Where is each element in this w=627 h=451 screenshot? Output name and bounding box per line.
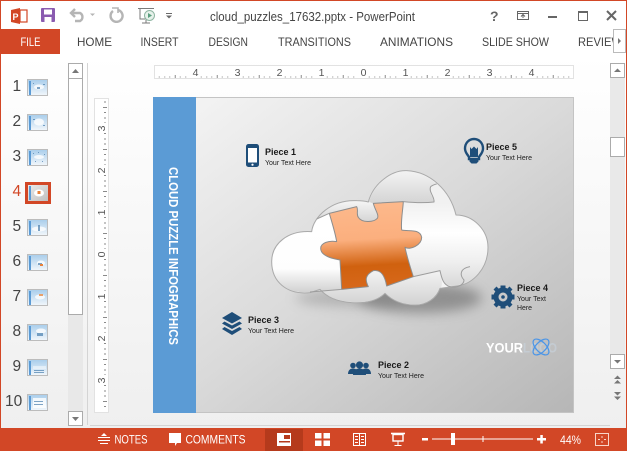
- zoom slider: [422, 433, 546, 445]
- vertical ruler: 0: [96, 251, 108, 257]
- item: Piece 3: Piece 3: [248, 315, 279, 325]
- vertical ruler: 1: [96, 209, 108, 215]
- tab labels: HOME: [77, 35, 112, 49]
- comments button: COMMENTS: [186, 432, 246, 446]
- thumbnail contents: [29, 81, 46, 410]
- slide numbers: 2: [12, 113, 21, 130]
- item: Piece 3: Your Text Here: [248, 328, 294, 335]
- item: Piece 2: Your Text Here: [378, 373, 424, 380]
- tab labels: ANIMATIONS: [380, 35, 453, 49]
- slide numbers: 9: [12, 358, 21, 375]
- fit to window button: [596, 434, 608, 446]
- document title: cloud_puzzles_17632.pptx - PowerPoint: [210, 10, 415, 24]
- cloud puzzle: [272, 171, 488, 305]
- slide numbers: 4: [12, 183, 22, 200]
- slide numbers: 10: [5, 393, 23, 410]
- item: Piece 1: [246, 144, 311, 167]
- piece: top lobe: [369, 171, 437, 203]
- comments button: [169, 432, 246, 446]
- panel: slide: [153, 97, 574, 413]
- tab labels: INSERT: [140, 35, 179, 49]
- logo: LOGO: [523, 340, 557, 356]
- piece seams: [310, 184, 470, 292]
- item: Piece 3: [222, 312, 294, 335]
- item: Piece 5: [465, 139, 532, 164]
- logo: YOUR: [486, 340, 523, 356]
- vertical ruler: [94, 98, 108, 412]
- item: Piece 1: Piece 1: [265, 147, 296, 157]
- notes button: NOTES: [114, 432, 148, 446]
- FILE tab: [1, 29, 60, 54]
- icon: light bulb: [465, 139, 483, 164]
- slide show button: [391, 434, 405, 446]
- ribbon tabs: [1, 29, 626, 54]
- icon: PowerPoint logo: P: [12, 12, 19, 22]
- slide numbers: 6: [12, 253, 21, 270]
- slide numbers: 1: [12, 78, 21, 95]
- piece: orange center: [321, 202, 422, 289]
- logo: [486, 336, 557, 358]
- icon: people: [348, 361, 371, 375]
- horizontal ruler: 3: [487, 67, 493, 79]
- vertical ruler: 1: [96, 293, 108, 299]
- FILE tab: FILE: [20, 35, 40, 49]
- icon: save: [41, 8, 55, 22]
- window controls: ?: [490, 8, 499, 24]
- piece: bottom: [310, 271, 442, 304]
- slide numbers: 8: [12, 323, 21, 340]
- slide numbers: 7: [12, 288, 21, 305]
- tab scroll button: [614, 30, 626, 52]
- cloud outline: [272, 171, 488, 305]
- tab labels: SLIDE SHOW: [482, 35, 550, 49]
- icon: PowerPoint logo: [11, 8, 27, 24]
- right scrollbar: [610, 63, 625, 400]
- vertical ruler: 3: [96, 377, 108, 383]
- horizontal ruler: 3: [235, 67, 241, 79]
- item: Piece 4: Your Text: [517, 296, 546, 303]
- status bar: [0, 428, 627, 451]
- icon: undo: [71, 9, 95, 21]
- horizontal ruler: 2: [445, 67, 451, 79]
- window controls: [490, 8, 616, 24]
- icon: gear: [492, 286, 514, 308]
- item: Piece 4: Piece 4: [517, 283, 548, 293]
- slide sorter button: [315, 433, 330, 446]
- piece: cloud base: [272, 171, 488, 305]
- selected thumbnail: [26, 184, 50, 202]
- slide numbers: 3: [12, 148, 21, 165]
- normal view button: [265, 429, 303, 451]
- item: Piece 2: [348, 360, 424, 380]
- item: Piece 4: Here: [517, 305, 532, 312]
- tab labels: TRANSITIONS: [278, 35, 351, 49]
- icon: customize menu: [166, 13, 172, 18]
- title: vertical heading: CLOUD PUZZLE INFOGRAPHICS: [166, 167, 181, 345]
- piece: right lobe: [402, 184, 487, 286]
- icon: redo: [111, 8, 123, 22]
- item: Piece 2: Piece 2: [378, 360, 409, 370]
- slide thumbnails: [28, 80, 48, 410]
- slide numbers: [5, 78, 23, 410]
- zoom percent: 44%: [560, 433, 581, 447]
- piece: top middle: [317, 201, 378, 221]
- horizontal ruler: 4: [529, 67, 535, 79]
- item: Piece 5: Your Text Here: [486, 155, 532, 162]
- vertical ruler: 3: [96, 125, 108, 131]
- tab labels: REVIEW: [578, 35, 623, 49]
- tab labels: DESIGN: [208, 35, 248, 49]
- horizontal ruler: 4: [193, 67, 199, 79]
- reading view button: [354, 434, 366, 446]
- pane dividers: [88, 63, 610, 426]
- icon: presenter view: [138, 8, 154, 23]
- horizontal ruler: 0: [361, 67, 367, 79]
- vertical ruler: 2: [96, 335, 108, 341]
- left scrollbar: [68, 63, 83, 426]
- horizontal ruler: 2: [277, 67, 283, 79]
- item: Piece 1: Your Text Here: [265, 160, 311, 167]
- item: Piece 4: [492, 283, 548, 312]
- horizontal ruler: [154, 66, 574, 79]
- vertical ruler: 2: [96, 167, 108, 173]
- panel: thumbnail pane: [5, 63, 83, 426]
- icon: layers: [222, 312, 242, 335]
- slide numbers: 5: [12, 218, 21, 235]
- piece: left lobe: [272, 213, 342, 292]
- cloud shadow: [295, 283, 482, 313]
- tab labels: [77, 35, 623, 49]
- item: Piece 5: Piece 5: [486, 142, 517, 152]
- notes button: [98, 432, 148, 446]
- horizontal ruler: 1: [319, 67, 325, 79]
- title bar: [11, 8, 616, 24]
- horizontal ruler: 1: [403, 67, 409, 79]
- sidebar: [153, 97, 196, 413]
- icon: smartphone: [246, 144, 259, 167]
